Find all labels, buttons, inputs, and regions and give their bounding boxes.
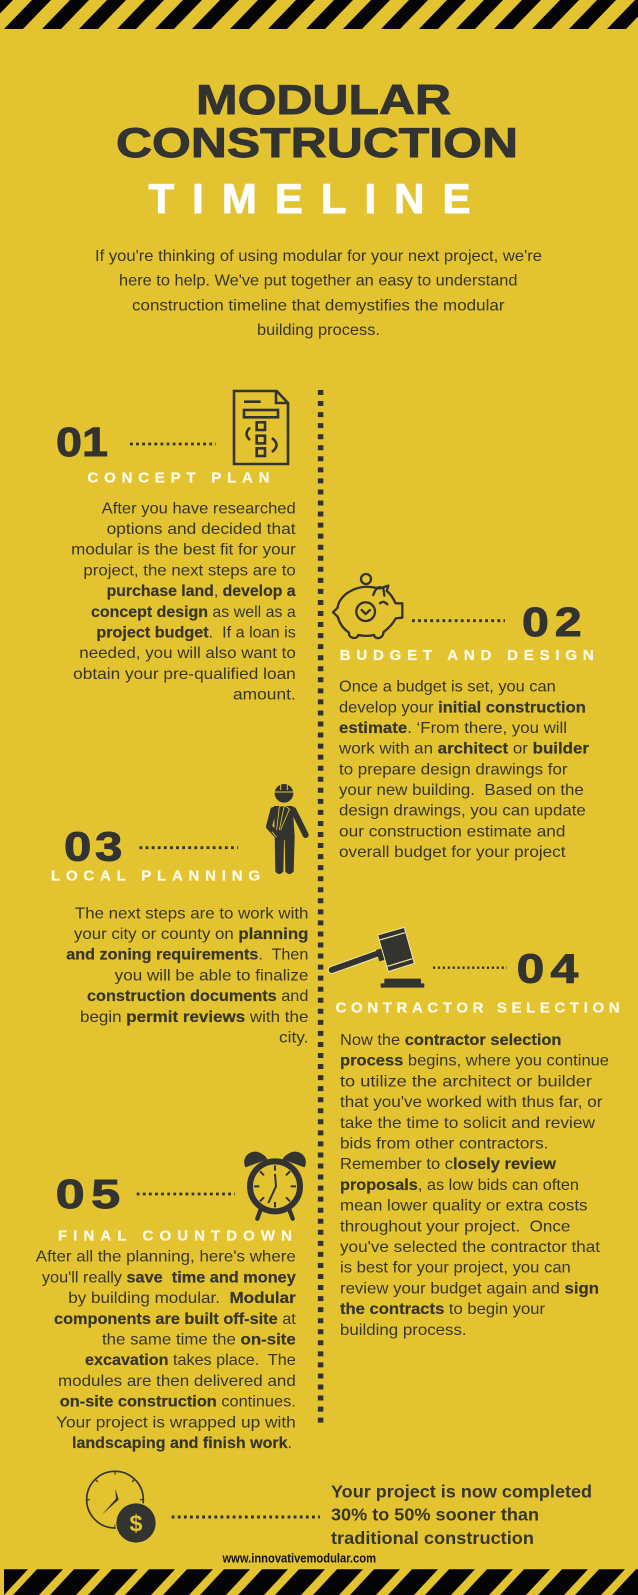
icon: plan document — [234, 391, 288, 464]
website url: www.innovativemodular.com — [222, 1552, 376, 1566]
step 04: body text: take the time to solicit and review — [340, 1115, 596, 1132]
step 05: body text: excavation takes place. The — [85, 1352, 296, 1369]
intro text: here to help. We've put together an easy to understand — [119, 273, 518, 290]
step 01: heading: CONCEPT PLAN — [88, 469, 270, 486]
step 05: body text: modules are then delivered and — [58, 1373, 296, 1390]
step 01: body text: project budget . If a loan is — [96, 624, 296, 642]
icon: construction worker — [269, 784, 306, 874]
title — [116, 76, 518, 222]
step 04: body text: you've selected the contractor that — [340, 1239, 601, 1256]
top hazard stripes — [0, 0, 638, 29]
step 03: body text: begin permit reviews with the — [80, 1009, 308, 1026]
step 02: body text: to prepare design drawings for — [339, 761, 568, 778]
step 03: body text: construction documents and — [87, 988, 308, 1005]
title: TIMELINE — [148, 175, 470, 222]
icon: piggy bank — [333, 574, 402, 638]
intro text: construction timeline that demystifies the modular — [132, 297, 504, 314]
step 03: body text: your city or county on planning — [74, 926, 308, 943]
central dotted timeline — [318, 390, 323, 1423]
step 04: body text: mean lower quality or extra costs — [340, 1198, 588, 1215]
closing statement: traditional construction — [331, 1528, 534, 1548]
step 04: body text: Now the contractor selection — [340, 1032, 561, 1049]
closing statement — [331, 1481, 592, 1548]
step 04: body text: review your budget again and sign — [340, 1280, 599, 1297]
step 02: dotted connector — [412, 619, 505, 622]
step 03: body text: The next steps are to work with — [75, 905, 308, 922]
intro text — [95, 248, 542, 339]
step 05: body text: After all the planning, here's where — [36, 1249, 296, 1266]
step 02: heading: BUDGET AND DESIGN — [340, 647, 594, 664]
step 01: body text: After you have researched — [102, 500, 296, 517]
step 04: body text: that you've worked with thus far, or — [340, 1094, 602, 1111]
step 04: body text: Remember to c losely review — [340, 1156, 557, 1173]
step 05: dotted connector — [137, 1193, 235, 1195]
step 01: number: 01 — [56, 419, 108, 465]
icon: clock with dollar coin: $ — [130, 1510, 143, 1536]
step 01: body text: obtain your pre-qualified loan — [73, 666, 296, 683]
closing statement: 30% to 50% sooner than — [331, 1505, 539, 1525]
icon: clock with dollar coin — [87, 1471, 157, 1544]
step 01: body text: purchase land, develop a — [107, 583, 296, 600]
step 04: body text: is best for your project, you can — [340, 1260, 571, 1277]
step 01: body text: project, the next steps are to — [83, 562, 296, 579]
step 04: body text: the contracts to begin your — [340, 1301, 545, 1318]
step 03: number: 03 — [64, 824, 126, 870]
step 04: body text — [340, 1032, 609, 1339]
step 04: body text: proposals, as low bids can often — [340, 1177, 579, 1194]
step 03: body text: you will be able to finalize — [115, 967, 308, 984]
step 05: body text: by building modular. Modular — [68, 1290, 296, 1307]
step 04: heading: CONTRACTOR SELECTION — [336, 999, 620, 1016]
step 04: body text: throughout your project. Once — [340, 1218, 570, 1235]
closing statement: Your project is now completed — [331, 1481, 592, 1501]
step 05: body text: the same time the on-site — [102, 1332, 296, 1348]
step 02: body text: overall budget for your project — [339, 844, 566, 861]
step 02: body text: develop your initial construction — [339, 699, 586, 716]
step 03: heading: LOCAL PLANNING — [51, 868, 260, 885]
step 05: body text: components are built off-site at — [54, 1311, 296, 1328]
icon: alarm clock — [244, 1152, 306, 1219]
step 02: body text: Once a budget is set, you can — [339, 679, 556, 696]
step 01: body text: modular is the best fit for your — [71, 542, 296, 559]
step 02: body text: design drawings, you can update — [339, 803, 586, 820]
step 01: dotted connector — [130, 443, 216, 445]
intro text: If you're thinking of using modular for your next project, we're — [95, 248, 542, 265]
step 05: body text: you'll really save time and money — [42, 1269, 296, 1286]
final dotted connector — [172, 1516, 320, 1518]
step 02: number: 02 — [522, 599, 588, 645]
step 05: body text: Your project is wrapped up with — [56, 1414, 296, 1431]
step 01: body text: amount. — [233, 687, 296, 704]
step 05: body text: on-site construction continues. — [60, 1394, 296, 1411]
step 05: heading: FINAL COUNTDOWN — [58, 1228, 292, 1245]
step 02: body text — [338, 679, 589, 861]
step 01: body text: needed, you will also want to — [79, 645, 296, 662]
step 04: body text: bids from other contractors. — [340, 1136, 548, 1152]
step 05: body text — [36, 1249, 296, 1452]
step 02: body text: estimate . ‘From there, you will — [339, 720, 567, 737]
step 05: number: 05 — [56, 1171, 127, 1217]
step 04: dotted connector — [433, 967, 507, 969]
step 04: body text: process begins, where you continue — [340, 1053, 609, 1070]
bottom hazard stripes — [4, 1569, 638, 1595]
step 04: body text: building process. — [340, 1322, 467, 1339]
step 03: body text: and zoning requirements . Then — [66, 947, 308, 964]
step 01: body text — [71, 500, 296, 704]
step 04: body text: to utilize the architect or builder — [340, 1073, 592, 1090]
step 03: body text: city. — [279, 1030, 308, 1046]
step 01: body text: concept design as well as a — [91, 604, 296, 621]
step 04: number: 04 — [517, 946, 584, 992]
intro text: building process. — [257, 322, 380, 339]
step 03: body text — [66, 905, 308, 1046]
icon: gavel — [332, 927, 424, 988]
step 03: dotted connector — [140, 846, 238, 849]
title: CONSTRUCTION — [116, 119, 518, 166]
step 02: body text: work with an architect or builder — [338, 741, 589, 758]
step 02: body text: your new building. Based on the — [339, 782, 584, 799]
step 01: body text: options and decided that — [107, 521, 296, 538]
step 02: body text: our construction estimate and — [339, 823, 566, 840]
title: MODULAR — [196, 76, 451, 123]
step 05: body text: landscaping and finish work . — [72, 1435, 292, 1452]
